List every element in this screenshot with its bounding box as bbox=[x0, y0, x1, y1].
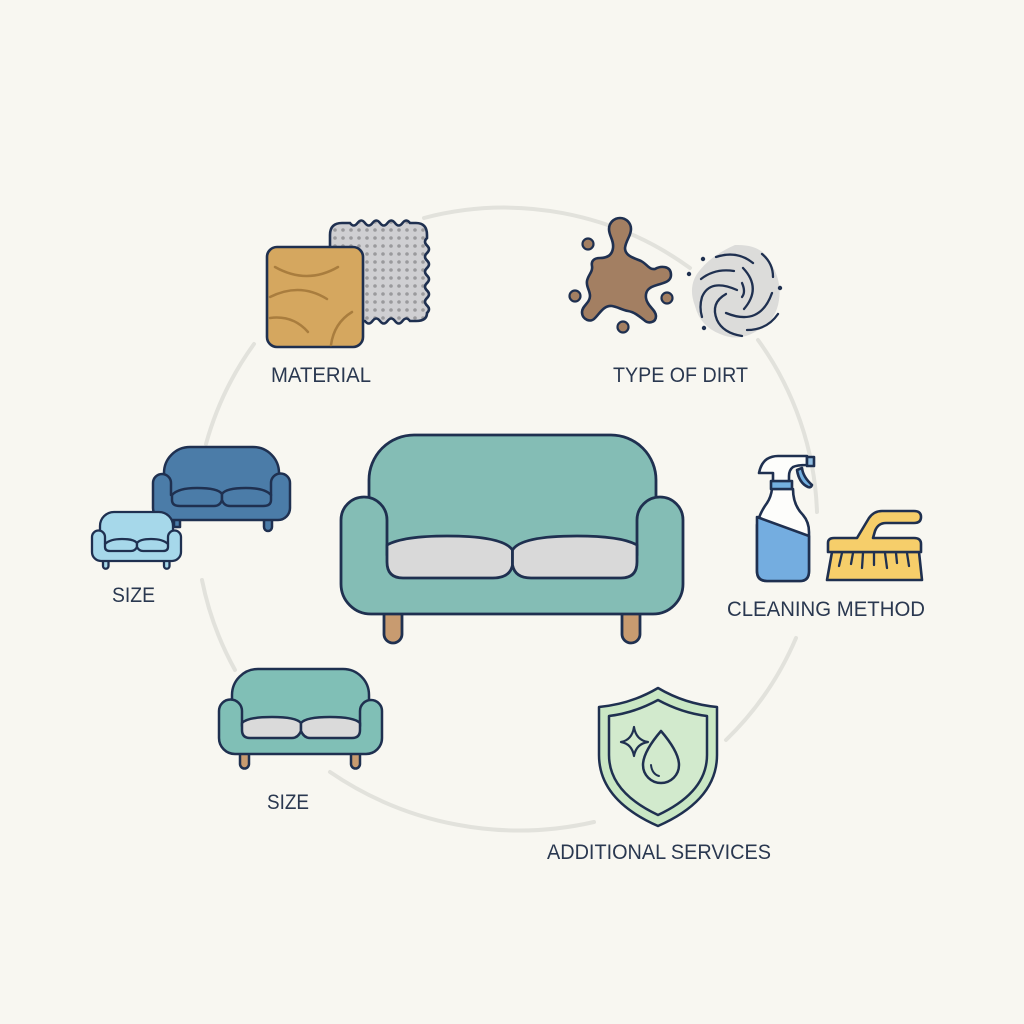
label: additional services: ADDITIONAL SERVICES bbox=[547, 841, 771, 864]
central sofa bbox=[341, 435, 683, 643]
label: size upper: SIZE bbox=[112, 584, 155, 607]
type of dirt icon bbox=[570, 218, 782, 338]
label: type of dirt: TYPE OF DIRT bbox=[613, 364, 748, 387]
material icon bbox=[267, 220, 429, 347]
ring bbox=[202, 208, 817, 830]
label: material: MATERIAL bbox=[271, 364, 371, 387]
small light-blue sofa icon bbox=[92, 512, 181, 569]
cleaning method icon bbox=[757, 456, 922, 581]
additional services icon bbox=[599, 688, 717, 826]
large blue sofa icon bbox=[153, 447, 290, 531]
teal sofa icon bbox=[219, 669, 382, 769]
label: size lower: SIZE bbox=[267, 791, 309, 814]
label: cleaning method: CLEANING METHOD bbox=[727, 598, 925, 621]
